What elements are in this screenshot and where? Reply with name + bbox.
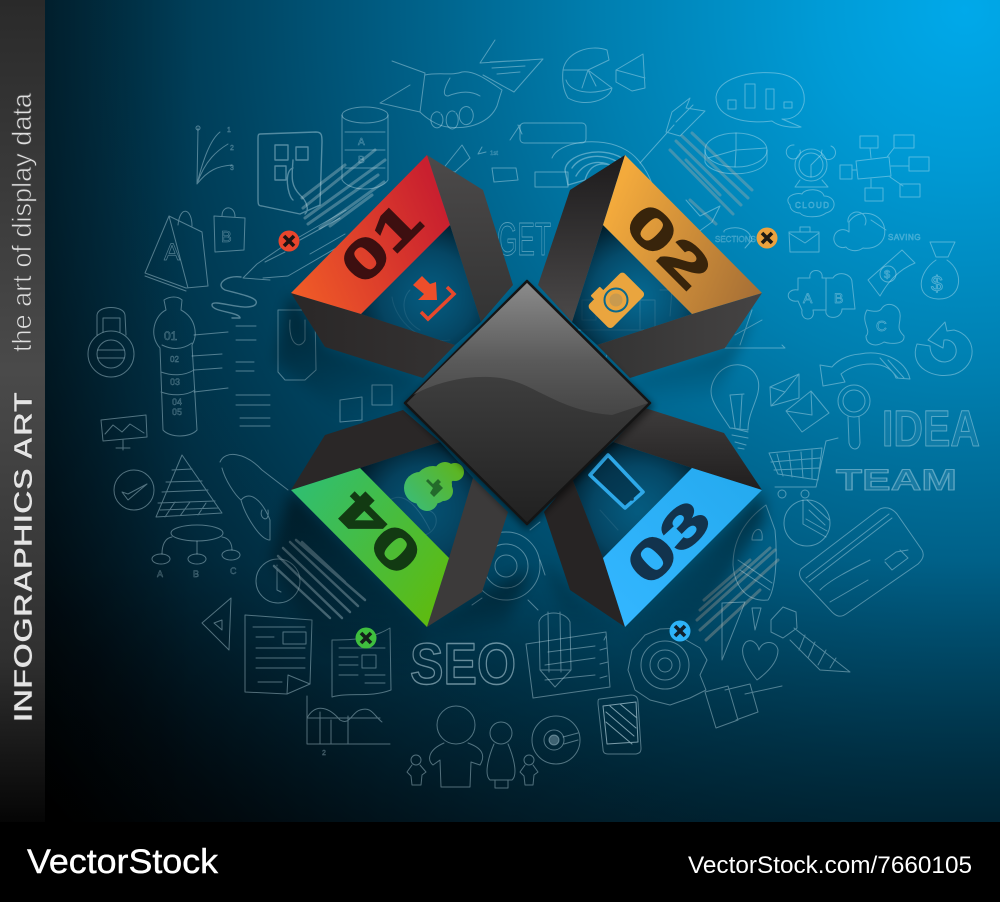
orange label <box>603 155 762 314</box>
doodle: pie chart right <box>705 133 767 174</box>
doodle: coffee cup <box>532 716 580 764</box>
doodle: TEAM lettering: TEAM <box>836 464 957 497</box>
red label <box>291 155 450 314</box>
doodle: triangle tag <box>202 598 231 650</box>
doodle: mouse device <box>220 454 288 540</box>
doodle: presentation board <box>101 415 147 450</box>
doodle: shopping bag A: A <box>164 239 180 266</box>
blue label <box>603 468 762 627</box>
doodle: numbered bottle <box>154 297 270 436</box>
doodle: numbered bottle: 01 <box>164 329 178 343</box>
close badge green <box>356 628 376 648</box>
doodle: puzzle C <box>865 304 904 345</box>
doodle: line graph: 2 <box>322 750 326 757</box>
icon: download check <box>413 276 454 319</box>
doodle: numbered bottle: 05 <box>172 407 182 417</box>
panel: 03 blue ribbon <box>544 408 762 627</box>
doodle: gear bottom centre <box>470 522 545 610</box>
doodle: briefcase <box>789 227 819 252</box>
doodle: padlock <box>88 308 134 377</box>
doodle: ribbon inner sketches <box>390 290 651 555</box>
doodle: 3D pie chart <box>563 48 645 103</box>
number 03: 03 <box>615 489 723 596</box>
doodle: document <box>245 615 312 694</box>
folded dark band, top <box>427 155 513 322</box>
doodle: puzzle pieces: A <box>803 290 813 306</box>
doodle: curve chart: 2 <box>230 145 234 152</box>
folded dark band, left <box>538 155 625 322</box>
doodle: org chart: B <box>193 569 199 579</box>
doodle: shopping bag B <box>214 208 245 252</box>
doodle: shopping cart <box>769 438 838 498</box>
doodle: cloud: CLOUD <box>795 201 831 210</box>
doodle: rounded banner and target <box>520 123 654 190</box>
doodle: check circle <box>114 470 154 510</box>
doodle: rocket <box>722 505 776 660</box>
doodle: org chart <box>152 525 240 579</box>
doodle: gear <box>628 628 707 705</box>
close badge orange <box>756 228 778 248</box>
panel: 01 red ribbon <box>291 155 513 378</box>
doodle: database cylinder <box>342 107 388 189</box>
close badge red <box>278 230 300 252</box>
doodle: piggy bank <box>834 212 921 251</box>
doodle: alarm clock <box>786 145 836 187</box>
sidebar strip <box>0 0 45 822</box>
doodle: sections diagram <box>686 200 785 348</box>
icon: cloud with user <box>404 462 464 511</box>
centre diamond <box>403 281 654 530</box>
doodle: org chart: A <box>157 569 163 579</box>
doodle: necktie <box>771 607 850 672</box>
doodle: wallet with pen <box>705 684 782 728</box>
opening behind ribbon 03 <box>572 442 692 558</box>
folded dark band, right <box>427 478 508 627</box>
doodle: BUDGET lettering: GET <box>497 213 551 265</box>
doodle: curve chart: 1 <box>227 127 231 134</box>
panel: 02 orange ribbon <box>538 155 762 378</box>
doodle: database cylinder: A <box>358 137 365 148</box>
number 04: 04 <box>326 478 433 586</box>
doodle: tablet with hand <box>258 132 322 214</box>
doodle: curved arrow <box>820 353 910 386</box>
doodle: lightbulb <box>711 365 759 449</box>
sidebar title: INFOGRAPHICS ART <box>8 392 38 722</box>
doodle: scribble <box>212 277 256 318</box>
doodle: speech bubble with bars <box>716 73 804 127</box>
ribbon drop shadows <box>270 293 765 680</box>
folded dark band, upper <box>613 408 762 490</box>
doodle: circular arrow <box>915 322 972 376</box>
doodle: envelopes <box>770 374 829 432</box>
doodle: numbered bottle: 04 <box>172 397 182 407</box>
doodle: numbered bottle: 02 <box>170 355 179 364</box>
doodle: shopping bag A <box>145 211 208 291</box>
doodle: piggy bank: SAVING <box>888 233 921 242</box>
doodle: pyramid <box>156 455 222 517</box>
icon: camera <box>583 267 646 330</box>
doodle: puzzle pieces <box>788 270 855 319</box>
doodle: money note <box>868 250 915 296</box>
hatch: dense lines left <box>302 150 385 228</box>
doodle: curve chart: 3 <box>230 165 234 172</box>
doodle: sections diagram: SECTIONS <box>715 235 756 244</box>
doodle: shopping bag B: B <box>221 229 232 246</box>
number 01: 01 <box>329 191 434 295</box>
doodle: bar chart behind camera <box>575 290 700 330</box>
doodle: heart <box>743 641 778 680</box>
doodle: handshake <box>380 40 543 129</box>
opening behind ribbon 01 <box>361 225 481 345</box>
doodle: clock i <box>256 559 300 603</box>
icon: smartphone <box>590 455 643 508</box>
opening behind ribbon 04 <box>360 442 473 558</box>
glossy highlight <box>413 283 648 415</box>
doodle: money bag: $ <box>931 273 943 296</box>
doodle: family figures <box>407 706 538 788</box>
doodle: money bag <box>921 242 959 299</box>
footer url: VectorStock.com/7660105 <box>688 852 972 879</box>
panel: 04 green ribbon <box>291 410 508 627</box>
doodle: curve chart <box>196 126 234 184</box>
hatch: dense lines right <box>670 133 752 224</box>
hatch: dense lines rocket <box>697 548 778 640</box>
doodle: money note: $ <box>884 269 890 281</box>
number 02: 02 <box>614 192 722 301</box>
folded dark band, lower <box>291 293 455 378</box>
close badge blue <box>670 620 690 642</box>
doodle: mind map <box>840 135 929 201</box>
doodle: newspaper <box>332 628 391 697</box>
doodle: small boxes: 1st <box>490 151 498 157</box>
doodle: SEO lettering: SEO <box>410 632 516 697</box>
doodle: smartphone <box>598 695 641 754</box>
doodle: org chart: C <box>230 566 237 576</box>
doodle: pencil <box>243 210 350 280</box>
opening behind ribbon 02 <box>572 225 692 345</box>
watermark footer <box>0 822 1000 902</box>
folded dark band, left <box>544 478 625 627</box>
green label <box>291 468 449 627</box>
folded dark band, lower <box>597 293 762 378</box>
hatch: news lines <box>274 540 365 618</box>
doodle: database cylinder: B <box>358 155 365 166</box>
doodle: credit card <box>800 508 923 616</box>
doodle: small boxes <box>442 125 522 182</box>
footer logo: VectorStock <box>27 843 219 881</box>
doodle: line graph <box>307 696 390 757</box>
folded dark band, upper <box>291 410 440 490</box>
doodle: arrow <box>640 98 705 163</box>
tagline: the art of display data <box>7 92 37 352</box>
doodle: paperclip lower-left <box>278 310 316 380</box>
doodle: magnifier <box>838 385 870 449</box>
doodle: small pie <box>784 500 830 546</box>
doodle: notebook with pencil <box>526 612 610 698</box>
doodle: small boxes under left ribbon <box>340 385 392 422</box>
doodle: puzzle pieces: B <box>834 290 843 306</box>
doodle: numbered bottle: 03 <box>170 377 180 387</box>
doodle: puzzle C: C <box>876 318 887 335</box>
doodle: cloud <box>788 190 834 217</box>
sketched doodle background <box>88 40 980 788</box>
